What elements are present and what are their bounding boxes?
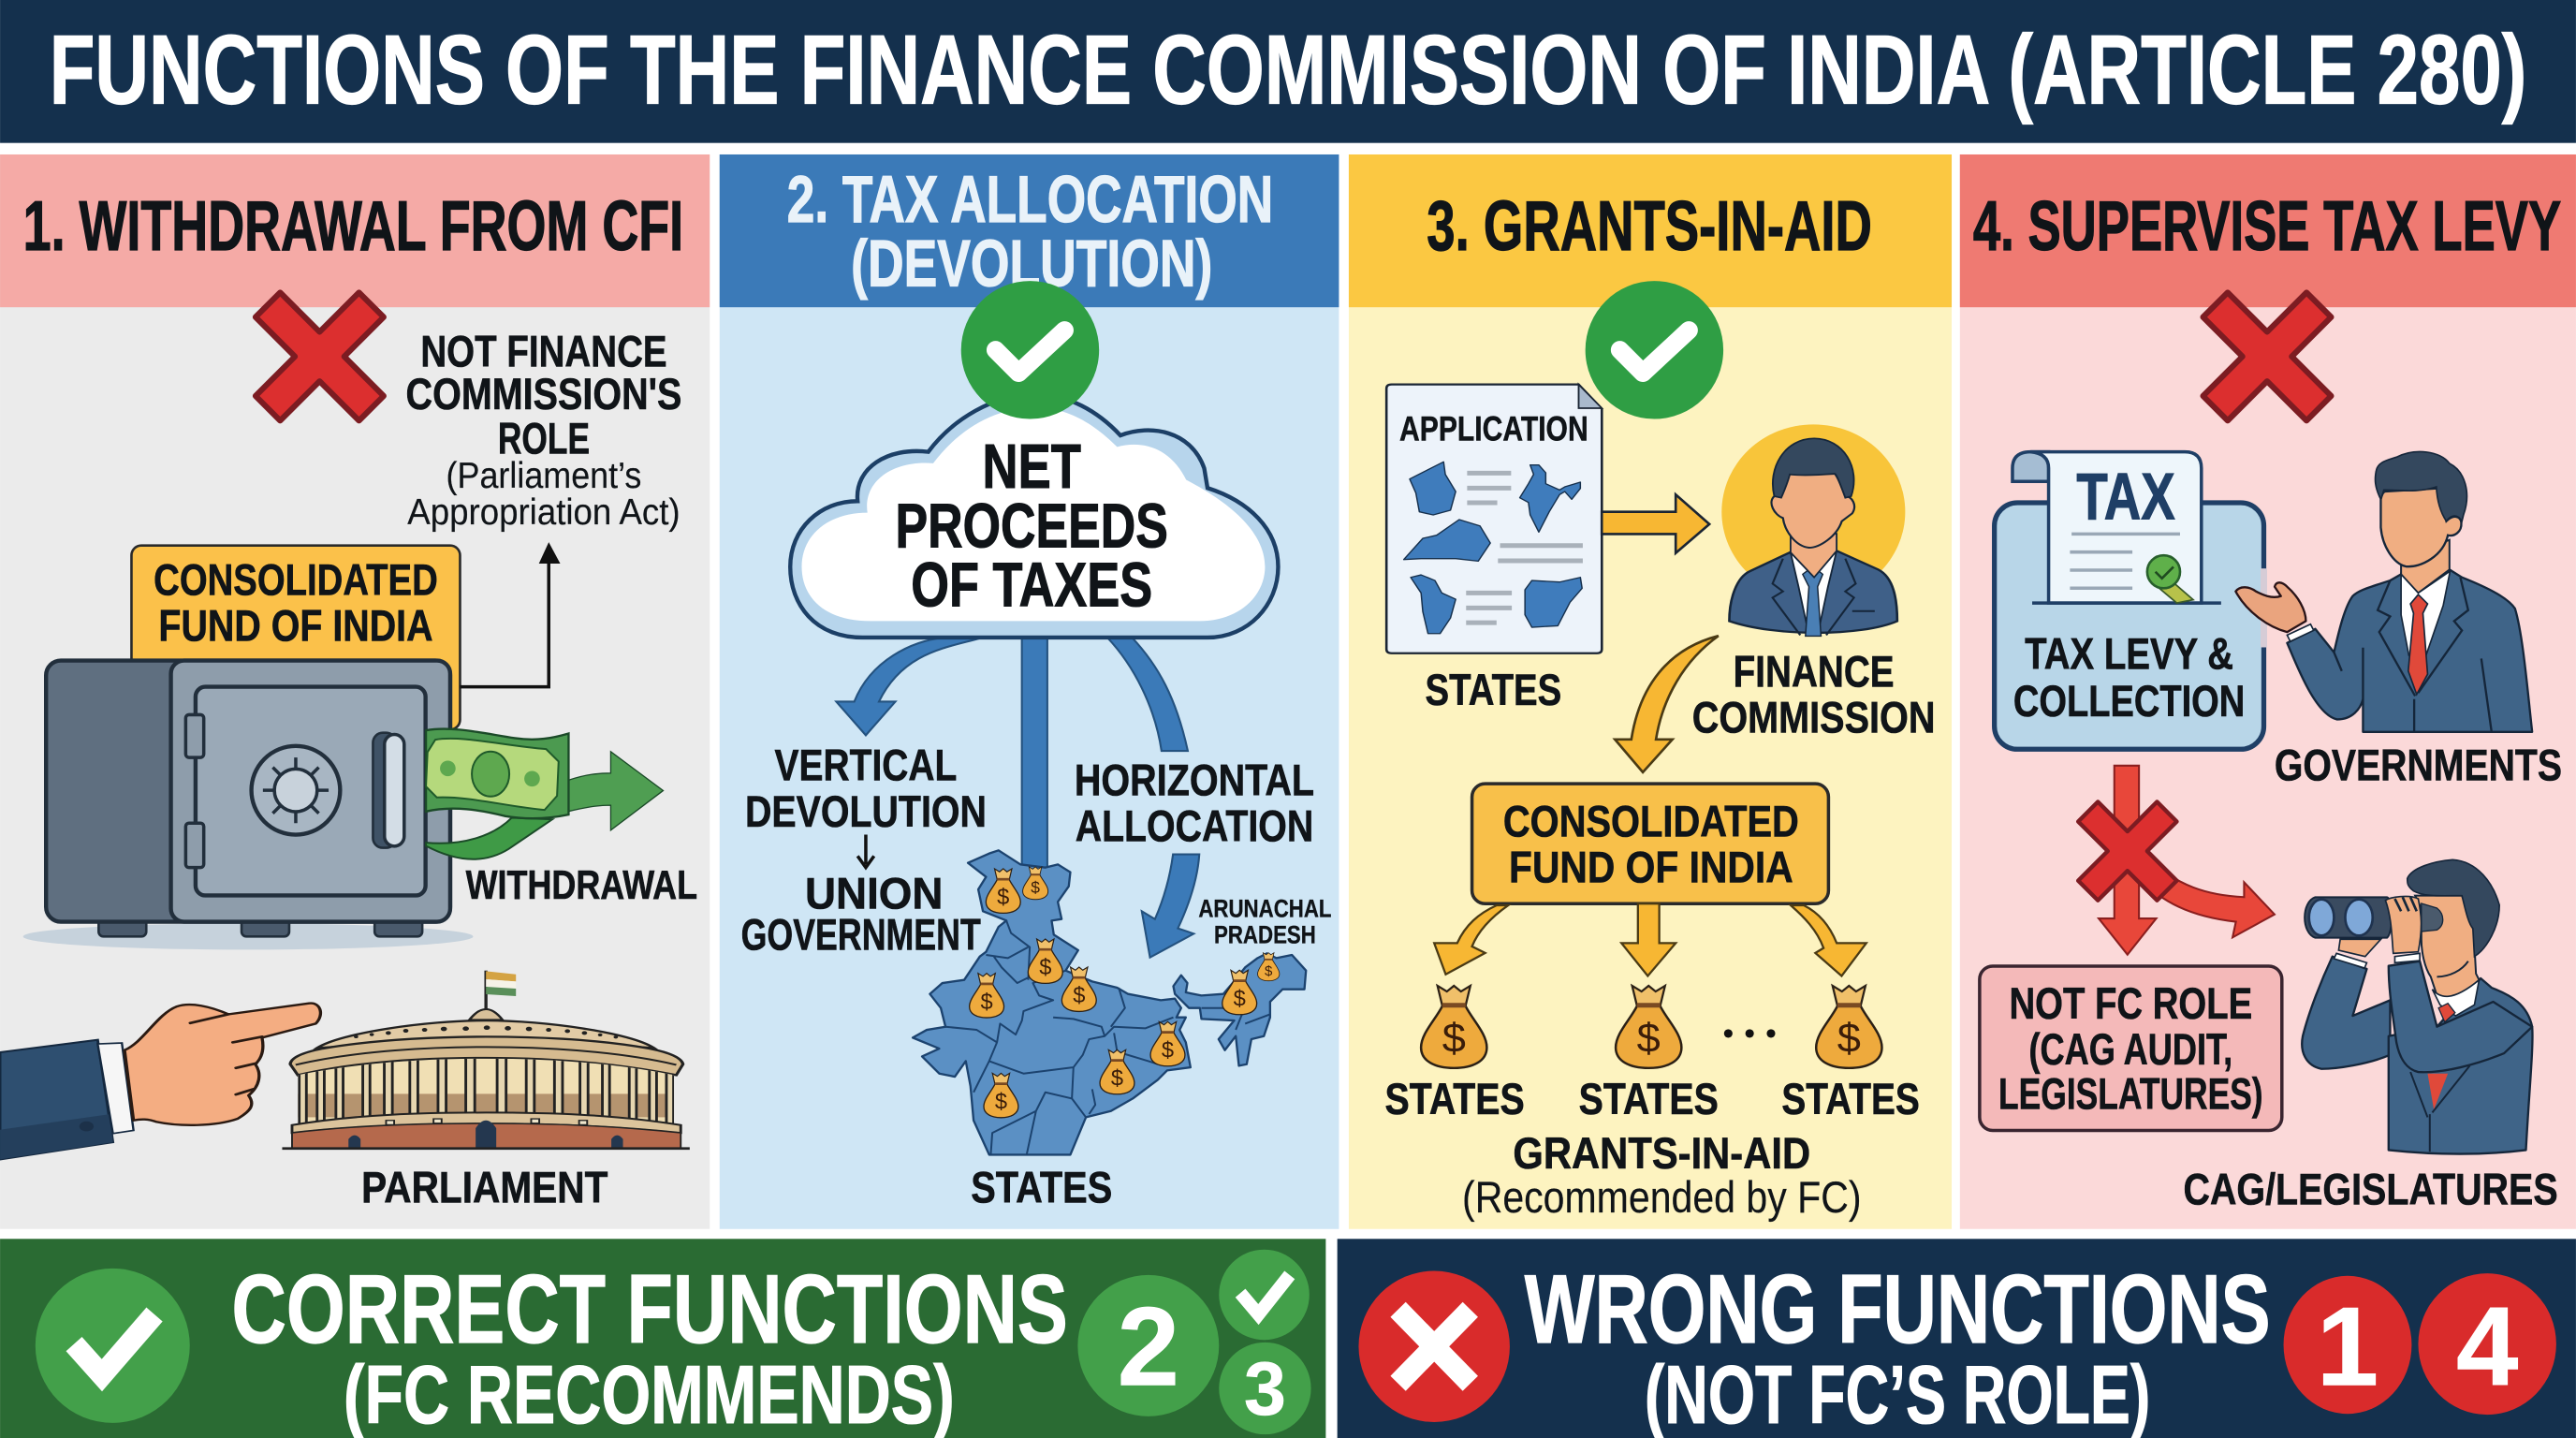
- label: arunachal pradesh: [1198, 893, 1332, 948]
- text: not finance commission's role: COMMISSION'S: [406, 370, 681, 419]
- label: finance commission: [1692, 648, 1935, 743]
- cloud: net proceeds of taxes: PROCEEDS: [896, 492, 1168, 561]
- box: tax levy and collection: [1995, 452, 2267, 749]
- document: application: [1386, 385, 1602, 653]
- icon: green check: [961, 281, 1099, 419]
- box: consolidated fund of india: [1472, 784, 1828, 903]
- badge: number 2: 2: [1118, 1284, 1179, 1409]
- heading: withdrawal from CFI: 1. WITHDRAWAL FROM CFI: [23, 186, 683, 265]
- text: vertical devolution: GOVERNMENT: [741, 910, 981, 960]
- arrow: commission to fund: [1615, 636, 1719, 772]
- ellipsis dots: [1724, 1029, 1776, 1037]
- text: not finance commission's role: ROLE: [498, 414, 590, 463]
- badge: number 1: 1: [2317, 1284, 2378, 1409]
- text: correct functions: (FC RECOMMENDS): [344, 1349, 955, 1438]
- map of india with money bags: $: [997, 886, 1009, 910]
- caption: grants-in-aid recommended by FC: [1462, 1129, 1862, 1223]
- labels: states row: STATES: [1579, 1075, 1719, 1124]
- text: vertical devolution: [741, 741, 987, 960]
- label: arunachal pradesh: ARUNACHAL: [1198, 893, 1332, 922]
- arrow: application to commission: [1602, 494, 1709, 553]
- box: not FC role: NOT FC ROLE: [2009, 979, 2252, 1029]
- icon: finance commission person: [1721, 424, 1905, 636]
- cloud: net proceeds of taxes: NET: [983, 433, 1081, 502]
- text: not finance commission's role: [406, 327, 681, 533]
- box: consolidated fund of india: FUND OF INDIA: [1509, 843, 1793, 892]
- badge: number 3: 3: [1244, 1347, 1286, 1431]
- map of india with money bags: $: [1162, 1039, 1174, 1064]
- icon: money bag: $: [1637, 1016, 1661, 1062]
- icon: money bag: $: [1837, 1016, 1861, 1062]
- map of india with money bags: $: [1039, 956, 1051, 980]
- text: not finance commission's role: NOT FINANCE: [420, 327, 667, 376]
- badge: number 4: [2418, 1273, 2556, 1415]
- map of india with money bags: $: [995, 1091, 1007, 1115]
- text: vertical devolution: VERTICAL: [775, 741, 957, 791]
- label: finance commission: COMMISSION: [1692, 694, 1935, 743]
- badge: number 3: [1219, 1343, 1311, 1434]
- box: consolidated fund of india: [131, 546, 460, 729]
- caption: grants-in-aid recommended by FC: (Recommended by FC): [1462, 1173, 1862, 1223]
- icon: CAG person with binoculars: [2302, 859, 2533, 1154]
- box: tax levy and collection: TAX LEVY &: [2025, 629, 2233, 679]
- arrows to states: [1434, 903, 1866, 976]
- icon: parliament building: [282, 971, 690, 1149]
- cloud: net proceeds of taxes: [790, 394, 1278, 638]
- badge: number 2: [1077, 1275, 1219, 1416]
- map of india with money bags: $: [980, 990, 993, 1015]
- text: correct functions: CORRECT FUNCTIONS: [232, 1255, 1068, 1363]
- icon: money bag: [1816, 986, 1881, 1068]
- map of india with money bags: $: [1111, 1067, 1123, 1092]
- map of india with money bags: $: [1265, 963, 1273, 979]
- text: vertical devolution: DEVOLUTION: [745, 787, 987, 837]
- icon: pointing hand: [0, 1004, 320, 1159]
- map of india with money bags: $: [1234, 988, 1246, 1012]
- heading: tax allocation: [787, 162, 1273, 300]
- badge: number 1: [2284, 1276, 2411, 1414]
- labels: states row: STATES: [1781, 1075, 1920, 1124]
- map of india with money bags: $: [1031, 878, 1040, 897]
- label: parliament: PARLIAMENT: [361, 1164, 607, 1213]
- icon: green check: [1586, 281, 1723, 419]
- icon: red cross: [2203, 292, 2331, 420]
- label: states: STATES: [1426, 666, 1561, 715]
- text: vertical devolution: UNION: [805, 870, 943, 919]
- box: not FC role: LEGISLATURES): [1998, 1070, 2263, 1120]
- text: horizontal allocation: [1075, 756, 1314, 852]
- map of india with money bags: $: [1073, 984, 1085, 1008]
- labels: states row: STATES: [1385, 1075, 1525, 1124]
- heading: grants-in-aid: 3. GRANTS-IN-AID: [1427, 186, 1872, 265]
- text: wrong functions: (NOT FC’S ROLE): [1645, 1349, 2150, 1438]
- icon: money bag: [1616, 986, 1681, 1068]
- box: consolidated fund of india: CONSOLIDATED: [1503, 797, 1799, 846]
- panel: 1. withdrawal from CFI: [0, 154, 710, 1229]
- heading: tax allocation: 2. TAX ALLOCATION: [787, 162, 1273, 236]
- box: tax levy and collection: COLLECTION: [2013, 677, 2245, 726]
- icon: money bag: [1421, 986, 1486, 1068]
- icon: red cross on arrow: [2078, 801, 2176, 901]
- panel: 2. tax allocation: [720, 154, 1339, 1229]
- icon: safe: [23, 661, 474, 949]
- icon: red cross: [256, 292, 384, 420]
- text: not finance commission's role: Appropriation Act): [407, 492, 681, 533]
- box: consolidated fund of india: CONSOLIDATED: [154, 555, 438, 605]
- arrows: blocked paths: [2099, 766, 2275, 955]
- arrow: up to note: [460, 559, 549, 687]
- badge: small check: [1219, 1250, 1310, 1340]
- banner: correct functions: [0, 1239, 1325, 1438]
- badge: number 4: 4: [2456, 1284, 2518, 1409]
- heading: tax allocation: (DEVOLUTION): [851, 226, 1212, 300]
- panel: 4. supervise tax levy: [1960, 154, 2576, 1229]
- arrows from cloud: [836, 633, 1199, 958]
- label: states: STATES: [971, 1164, 1112, 1213]
- label: withdrawal: WITHDRAWAL: [466, 862, 697, 908]
- map of india with money bags: [913, 850, 1306, 1154]
- text: wrong functions: WRONG FUNCTIONS: [1525, 1255, 2271, 1363]
- box: not FC role: [1980, 966, 2282, 1130]
- icon: money bag: $: [1442, 1016, 1466, 1062]
- box: consolidated fund of india: FUND OF INDIA: [158, 601, 433, 651]
- text: horizontal allocation: HORIZONTAL: [1075, 756, 1314, 805]
- box: not FC role: (CAG AUDIT,: [2029, 1025, 2232, 1075]
- icon: banknote and withdrawal arrow: [426, 729, 663, 859]
- text: not finance commission's role: (Parliament’s: [446, 456, 641, 496]
- icon: government official: [2235, 452, 2532, 732]
- box: tax levy and collection: TAX: [2076, 460, 2175, 534]
- cloud: net proceeds of taxes: OF TAXES: [911, 551, 1152, 621]
- arrow head: [539, 542, 561, 564]
- text: wrong functions: [1525, 1255, 2271, 1438]
- text: correct functions: [232, 1255, 1068, 1438]
- label: finance commission: FINANCE: [1734, 648, 1895, 697]
- panel: 3. grants-in-aid: [1349, 154, 1952, 1229]
- text: horizontal allocation: ALLOCATION: [1076, 802, 1313, 852]
- banner: wrong functions: [1338, 1239, 2576, 1438]
- icon: cross badge: [1358, 1271, 1510, 1422]
- caption: grants-in-aid recommended by FC: GRANTS-IN-AID: [1513, 1129, 1810, 1179]
- document: application: APPLICATION: [1399, 410, 1588, 448]
- labels: states row: [1385, 1075, 1920, 1124]
- label: arunachal pradesh: PRADESH: [1214, 919, 1316, 948]
- icon: check badge: [36, 1269, 190, 1423]
